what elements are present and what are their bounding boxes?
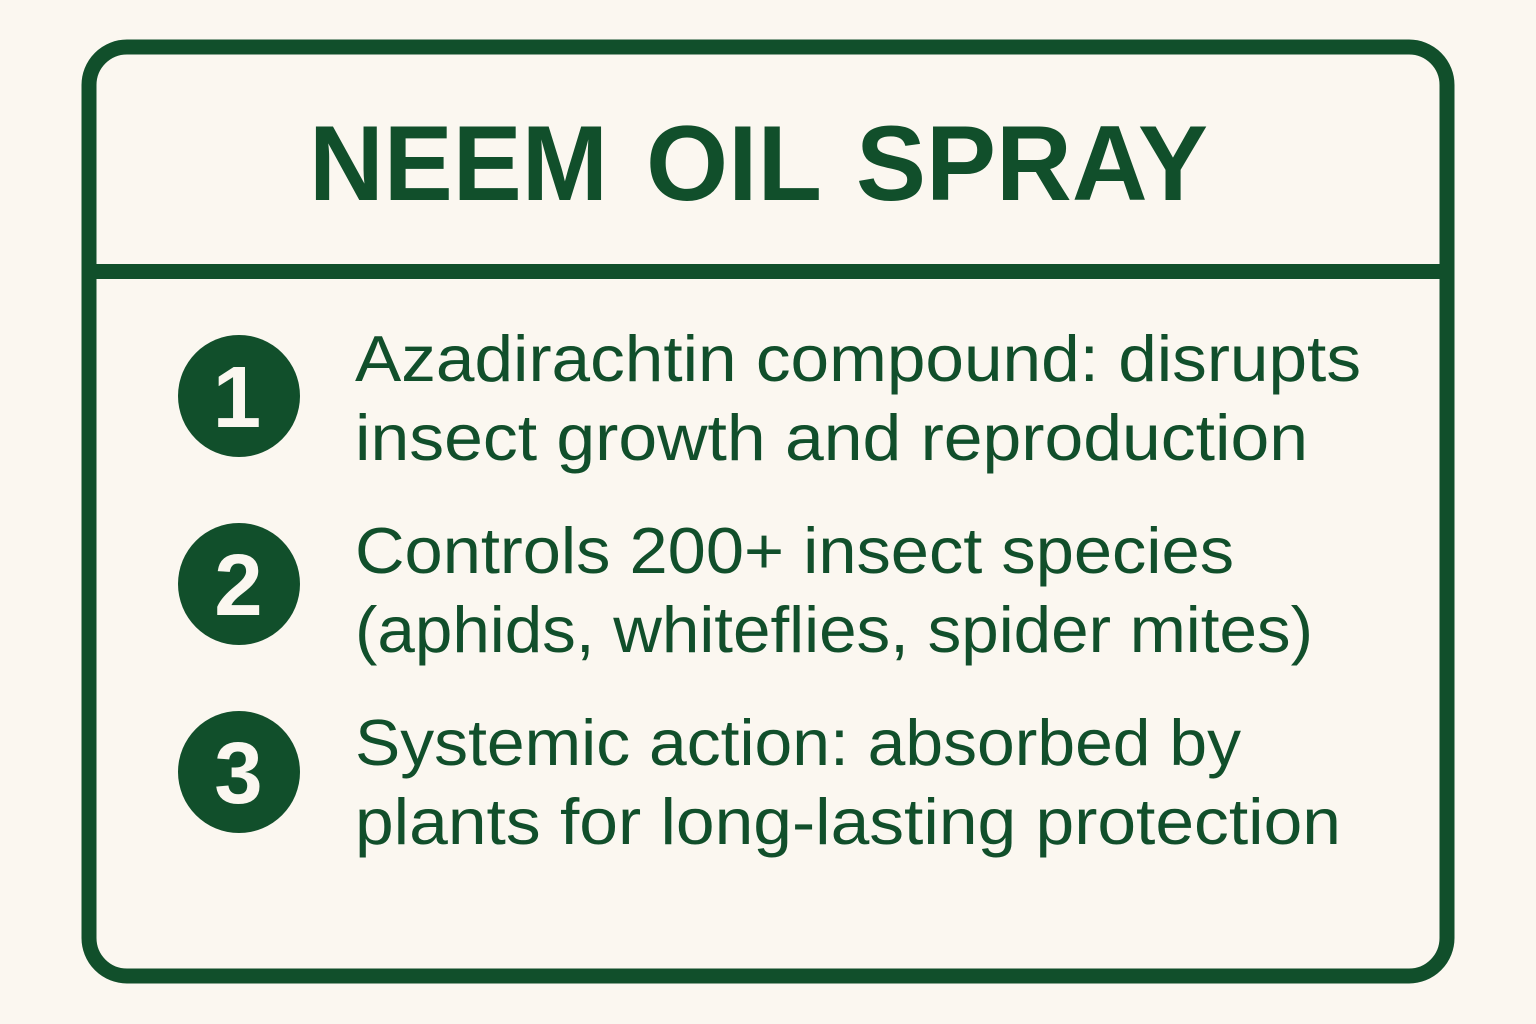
icon: number badge 1: 1 bbox=[213, 349, 261, 446]
text block: systemic action: plants for long-lasting protection bbox=[355, 785, 1341, 858]
text block: azadirachtin: Azadirachtin compound: disrupts bbox=[355, 322, 1361, 395]
title: OIL bbox=[646, 103, 822, 223]
text block: species controlled bbox=[355, 514, 1313, 666]
icon: number badge 2 bbox=[178, 523, 300, 645]
icon: number badge 1 bbox=[178, 335, 300, 457]
title bbox=[309, 103, 1208, 223]
text block: species controlled: (aphids, whiteflies, spider mites) bbox=[355, 593, 1313, 666]
item 3 bbox=[178, 706, 1341, 858]
text block: systemic action bbox=[355, 706, 1341, 858]
icon: number badge 2: 2 bbox=[214, 537, 263, 634]
text block: azadirachtin: insect growth and reproduction bbox=[355, 401, 1308, 474]
text block: azadirachtin bbox=[355, 322, 1361, 474]
item 2 bbox=[178, 514, 1313, 666]
item 1 bbox=[178, 322, 1361, 474]
title: SPRAY bbox=[856, 103, 1208, 223]
icon: number badge 3: 3 bbox=[214, 725, 263, 822]
icon: number badge 3 bbox=[178, 711, 300, 833]
title: NEEM bbox=[309, 103, 608, 223]
text block: species controlled: Controls 200+ insect species bbox=[355, 514, 1234, 587]
text block: systemic action: Systemic action: absorbed by bbox=[355, 706, 1242, 779]
